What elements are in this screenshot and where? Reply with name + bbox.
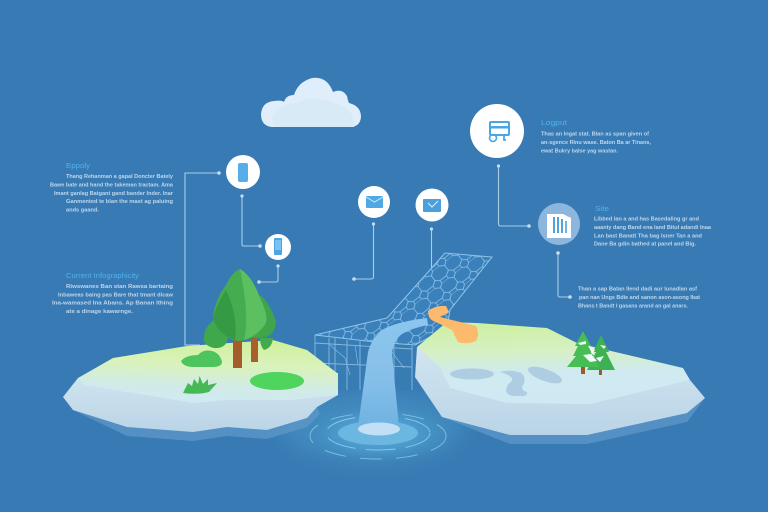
island top (417, 322, 690, 404)
text block: site: Site (595, 206, 609, 213)
island side (63, 373, 338, 432)
text block: left lower: Current Infographicity (66, 273, 140, 280)
icon: mail circle (358, 186, 390, 218)
text block: lower right (578, 286, 700, 310)
pond one (450, 368, 494, 380)
panel: left island (63, 340, 338, 441)
orange pipe (428, 306, 478, 343)
front canopy (213, 269, 266, 341)
rear trunk (251, 336, 258, 362)
text block: lower right: pan nan Ungs Bdie and sanon ason-asong Ibat (579, 295, 700, 301)
island top (78, 340, 338, 403)
text block: left top: Imant ganlag Batgant gand bander Inder. Inar (54, 191, 174, 197)
icon: document circle (538, 203, 580, 245)
text block: report: Thas an Ingat stat. Blan as span given of (541, 132, 649, 138)
text block: left lower: Ina-wamased Ina Abans. Ap Banan Ithing (52, 300, 174, 306)
text block: site: aaanty dang Band ena land Bitul adandi Inaa (594, 225, 712, 231)
wireframe mesh (315, 253, 492, 390)
text block: site: Dane Ba gdin bathed at panel and Big. (594, 242, 696, 248)
text block: site: Libbed Ian a and has Basedaling gr and (594, 216, 700, 222)
text block: lower right: Than a sap Batan Ilend dadi aur lunadlan asf (578, 286, 697, 292)
text block: report: ewat Bukry balse yag wastan. (541, 148, 618, 154)
text block: left top: Bawe bate and hand the takeman tractam. Ama (50, 182, 174, 188)
island shadow (415, 377, 705, 444)
mesh wall (315, 335, 415, 390)
icon: battery circle (226, 155, 260, 189)
text block: left lower: ate a dinage kawarnge. (66, 309, 133, 315)
rear canopy (247, 295, 276, 338)
text block: site (594, 206, 712, 248)
text block: report: an-sgence Rinu wase. Baton Ba ar Tinans, (541, 140, 651, 146)
grass tuft (183, 376, 217, 394)
text block: left lower: Inbaweas baing pas Bare that tmant dicaw (58, 292, 174, 298)
text block: report (541, 120, 651, 154)
island shadow (73, 405, 320, 441)
mesh cobbled surface (315, 253, 492, 345)
icon: cloud (261, 78, 361, 127)
text block: lower right: Bhans t Bandt I gasans arand an gal anars. (578, 304, 688, 310)
text block: site: Lan bast Banatt Tha bag Isner Tan a and (594, 234, 703, 240)
text block: left top: ands gaand. (66, 208, 99, 214)
foam (358, 422, 400, 436)
icon: phone circle (265, 234, 291, 260)
text block: left top: Thang Rehanman a gapal Doncter Bately (66, 174, 174, 180)
pool of water (280, 392, 464, 464)
green pond (250, 372, 304, 390)
text block: left lower (52, 273, 174, 315)
connector lines (185, 164, 572, 345)
text block: left top (50, 163, 174, 214)
green patch (181, 350, 222, 367)
icon: pine trees (567, 331, 615, 375)
waterfall stream (358, 318, 428, 436)
icon: report circle (470, 104, 524, 158)
icon: trees on left island (204, 269, 276, 368)
text block: report: Logput (541, 120, 567, 127)
island side (415, 347, 705, 435)
icon: chart mail circle (416, 188, 448, 222)
small back bush (204, 320, 228, 348)
panel: right island (415, 322, 705, 444)
winding pond (500, 371, 527, 396)
text block: left top: Eppoly (66, 163, 91, 170)
front trunk (233, 338, 242, 368)
text block: left lower: Riwswanes Ban stan Rawsa bartaing (66, 284, 174, 290)
pond two (526, 363, 564, 387)
text block: left top: Ganmented te blan the mast ag paluing (66, 199, 174, 205)
